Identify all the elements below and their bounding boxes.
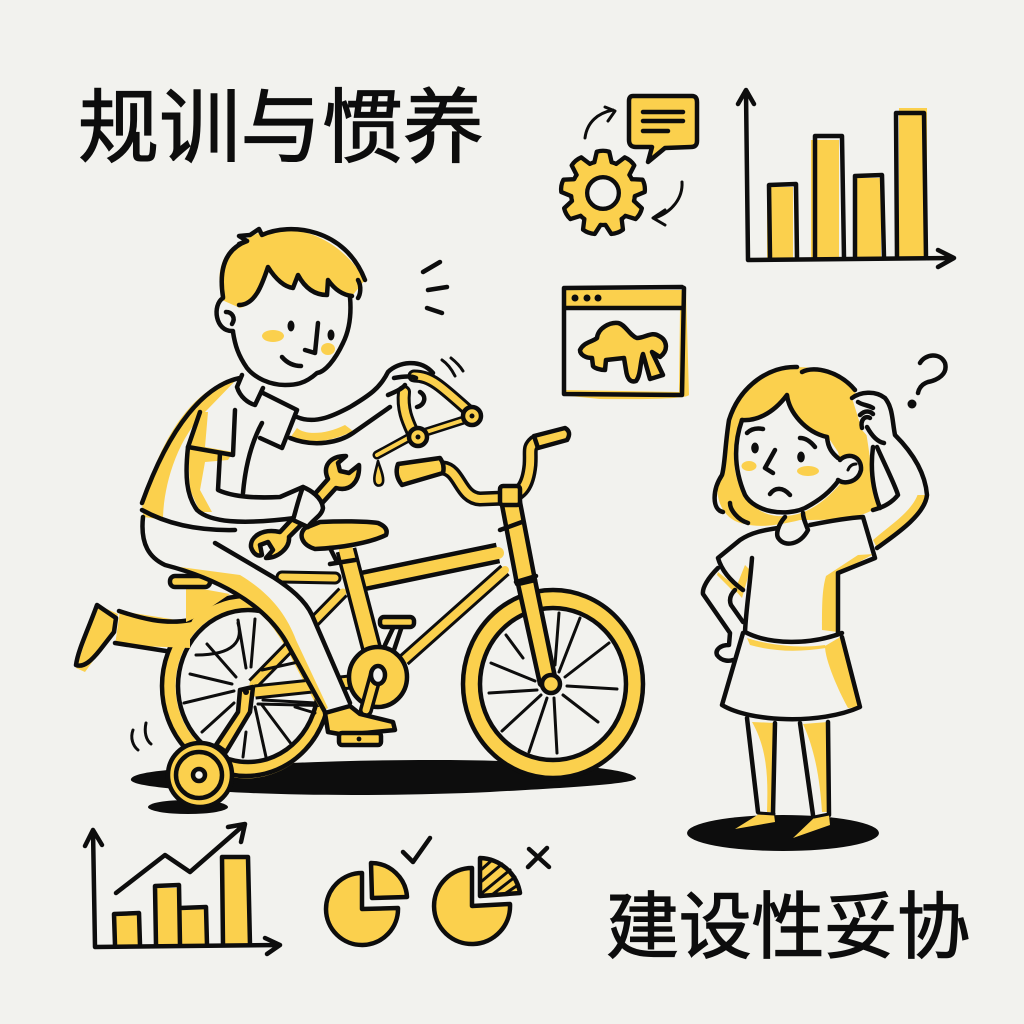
chart: pie with separated slice and check	[326, 838, 430, 945]
caption: 建设性妥协: 建设性妥协	[606, 887, 970, 968]
shoes	[735, 813, 830, 838]
icon: speech bubble	[629, 96, 697, 162]
training wheel	[132, 687, 253, 807]
torso outlines	[142, 375, 303, 530]
girl figure	[687, 355, 946, 851]
chart: pie with hatched slice and cross	[434, 848, 549, 944]
boy: head and upper body	[142, 229, 481, 530]
ground shadow	[687, 815, 879, 851]
dress: skirt	[722, 633, 860, 719]
pedal	[339, 733, 381, 745]
bar chart: top right	[738, 90, 954, 267]
seat block under leg	[186, 586, 230, 622]
icon: browser window with map	[564, 287, 689, 399]
title: 规训与惯养: 规训与惯养	[78, 84, 484, 174]
hair and face outline	[217, 229, 365, 385]
handlebar	[397, 428, 569, 505]
raised arm	[290, 363, 433, 443]
hair and face outline	[715, 367, 861, 523]
kicked-back leg	[76, 605, 190, 672]
face details	[742, 428, 819, 495]
icon: gear and speech bubble cycle	[560, 96, 697, 237]
rear wheel	[162, 596, 330, 776]
icon: wrench	[251, 456, 359, 558]
dress: top	[717, 517, 875, 642]
small front pedal	[385, 626, 402, 650]
left arm on hip	[703, 568, 743, 661]
ground shadow	[131, 760, 636, 795]
chart: bars with rising trend line	[85, 824, 280, 954]
boy figure	[142, 378, 326, 712]
hair	[717, 367, 877, 526]
bicycle	[131, 428, 643, 814]
motion ticks	[423, 262, 447, 313]
frame tubes	[253, 502, 560, 706]
brake lever tool	[374, 358, 481, 486]
crank and chainring	[349, 647, 407, 710]
map blob	[580, 323, 666, 381]
legs	[747, 718, 829, 815]
raised arm and hand	[852, 393, 927, 548]
hair	[219, 229, 365, 308]
icon: gear	[560, 151, 647, 237]
arrow: bubble to gear	[653, 182, 682, 225]
hand on wrench	[293, 487, 323, 527]
saddle and wrench	[251, 456, 387, 562]
front wheel	[463, 590, 643, 778]
yellow shoulder band	[142, 378, 326, 712]
arrow: gear to bubble	[585, 107, 615, 138]
shoe	[325, 706, 395, 735]
thigh and shin	[143, 517, 350, 713]
face details	[262, 320, 335, 366]
neck and collar	[777, 513, 808, 544]
boy: lower body and saddle	[76, 517, 395, 745]
oil droplet	[374, 461, 383, 486]
question mark	[908, 355, 946, 408]
face	[734, 395, 845, 516]
